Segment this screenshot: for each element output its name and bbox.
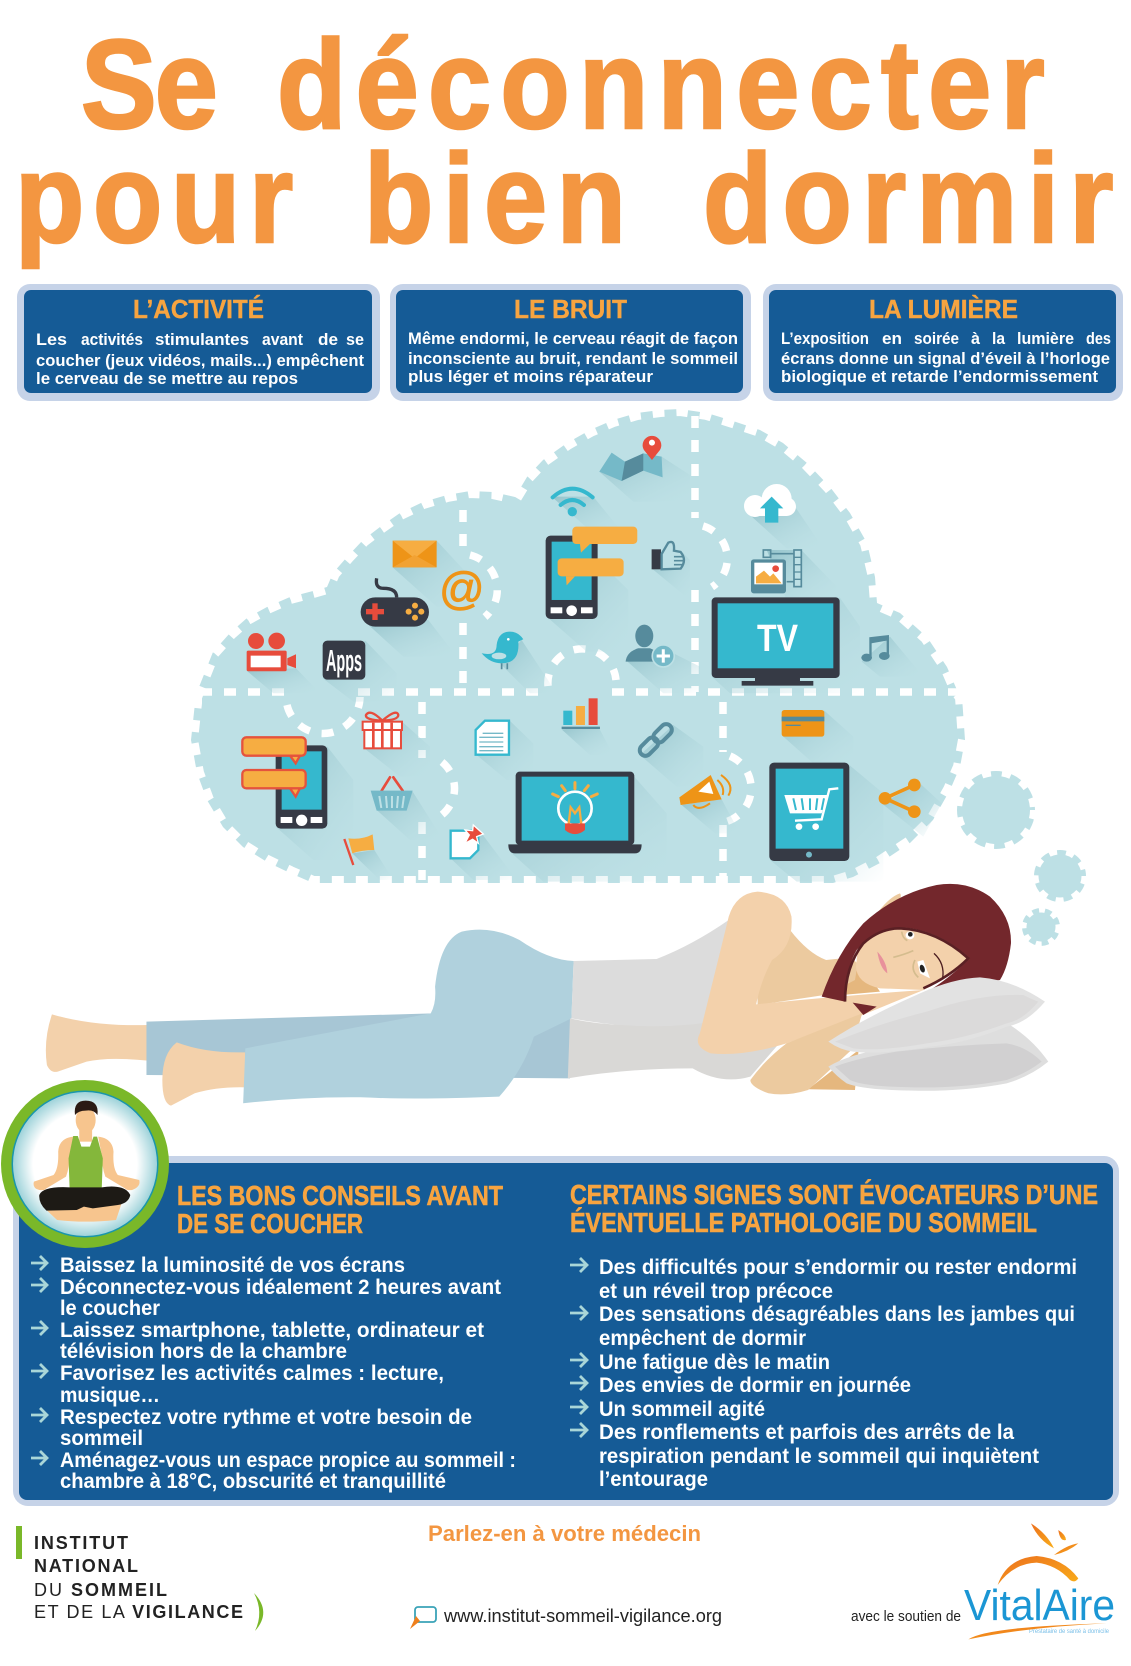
text: signs list: empêchent de dormir: [599, 1327, 806, 1350]
icon: television: TV: [757, 618, 799, 660]
text: advice list: Respectez votre rythme et votre besoin de: [60, 1406, 472, 1429]
text: la lumière: des: [1086, 329, 1111, 348]
text: l'activité: se: [346, 330, 364, 349]
cloud: [191, 409, 965, 883]
icon: television: [712, 597, 860, 693]
callout: talk to your doctor: Parlez-en à votre médecin: [428, 1521, 701, 1546]
website url: www.institut-sommeil-vigilance.org: [443, 1605, 722, 1626]
logo: vitalaire sponsor: VitalAire: [964, 1581, 1115, 1630]
icon: chain link: [637, 722, 703, 787]
panel: l'activité: [17, 284, 380, 401]
icon: speech bubble: [410, 1607, 436, 1629]
heading: signs: [570, 1179, 1098, 1238]
icon: shopping basket: [371, 777, 443, 840]
icon: document: [476, 720, 533, 780]
icon: gift: [363, 713, 430, 777]
logo: institut national du sommeil et de la vigilance: DU SOMMEIL: [34, 1580, 167, 1600]
panel: la lumière: [763, 284, 1123, 401]
text: advice list: Favorisez les activités calmes : lecture,: [60, 1362, 444, 1385]
logo: institut national du sommeil et de la vigilance: [16, 1526, 263, 1631]
text: signs list: Une fatigue dès le matin: [599, 1351, 830, 1374]
text: la lumière: à: [971, 329, 981, 348]
text: advice list: le coucher: [60, 1297, 160, 1320]
icon: tablet with cart: [769, 763, 883, 882]
icon: phone with red speech bubbles: [242, 737, 353, 860]
title: dormir: [703, 128, 1113, 269]
illustration: sleeping woman: [46, 884, 1048, 1106]
title: Se: [81, 14, 218, 155]
logo: vitalaire sponsor: [851, 1523, 1115, 1639]
text: advice list: musique…: [60, 1384, 160, 1407]
text: la lumière: soirée: [914, 329, 959, 348]
icon: bar chart: [562, 698, 613, 755]
icon: meditating figure badge: [1, 1080, 169, 1248]
text: signs list: Des envies de dormir en journée: [599, 1374, 911, 1397]
icon: share: [879, 779, 942, 837]
icon: map with pin: [599, 436, 690, 502]
title: bien: [364, 128, 626, 269]
icon: add user: [626, 625, 700, 693]
text: la lumière: la: [992, 329, 1005, 348]
heading: advice: DE SE COUCHER: [177, 1208, 363, 1239]
text: signs list: Des sensations désagréables dans les jambes qui: [599, 1303, 1075, 1326]
text: la lumière: en: [882, 329, 902, 348]
icon: pinned note: [451, 825, 517, 880]
title: pour: [15, 128, 293, 269]
text: le bruit: [408, 329, 738, 386]
text: l'activité: stimulantes: [155, 330, 249, 349]
title: déconnecter: [277, 14, 1045, 155]
icon: apps tile: [323, 641, 397, 702]
text: le bruit: inconsciente au bruit, rendant le sommeil: [408, 349, 738, 368]
text: signs list: [599, 1256, 1077, 1491]
text: advice list: télévision hors de la chambre: [60, 1340, 347, 1363]
text: advice list: Baissez la luminosité de vos écrans: [60, 1254, 405, 1277]
icon: credit card: [782, 710, 853, 763]
icon: bird: [482, 632, 557, 693]
text: la lumière: écrans donne un signal d’éveil à l’horloge: [781, 349, 1110, 368]
text: la lumière: L’exposition: [781, 329, 869, 348]
logo: vitalaire sponsor: Prestataire de santé à domicile: [1029, 1628, 1109, 1635]
icon: phone with speech bubbles: [546, 527, 637, 652]
icon: laptop with light bulb: [508, 772, 667, 882]
text: signs list: Des ronflements et parfois des arrêts de la: [599, 1421, 1014, 1444]
logo: vitalaire sponsor: avec le soutien de: [851, 1609, 961, 1625]
text: la lumière: lumière: [1017, 329, 1074, 348]
heading: la lumière: LA LUMIÈRE: [869, 294, 1018, 324]
icon: apps tile: Apps: [326, 643, 362, 678]
text: advice list: sommeil: [60, 1427, 143, 1450]
thought bubbles: [957, 771, 1086, 946]
logo: institut national du sommeil et de la vigilance: NATIONAL: [34, 1556, 138, 1576]
text: la lumière: biologique et retarde l’endormissement: [781, 367, 1098, 386]
heading: le bruit: LE BRUIT: [514, 294, 627, 324]
icon: megaphone: [679, 775, 740, 833]
text: l'activité: Les: [36, 330, 67, 349]
icon: cloud upload: [744, 484, 823, 548]
text: le bruit: plus léger et moins réparateur: [408, 367, 653, 386]
heading: signs: ÉVENTUELLE PATHOLOGIE DU SOMMEIL: [570, 1207, 1037, 1238]
icon: game controller: [361, 578, 457, 657]
text: l'activité: coucher (jeux vidéos, mails...) empêchent: [36, 351, 364, 370]
icon: music note: [861, 635, 923, 677]
text: advice list: [60, 1254, 516, 1493]
text: la lumière: [781, 329, 1111, 386]
text: l'activité: de: [318, 330, 338, 349]
icon: flag: [344, 834, 393, 880]
heading: advice: LES BONS CONSEILS AVANT: [177, 1180, 503, 1211]
text: l'activité: [36, 330, 364, 388]
panel: le bruit: [390, 284, 751, 401]
text: advice list: Laissez smartphone, tablette, ordinateur et: [60, 1319, 484, 1342]
heading: advice: [177, 1180, 503, 1239]
icon: envelope: [393, 541, 470, 607]
logo: institut national du sommeil et de la vigilance: INSTITUT: [34, 1533, 128, 1553]
arrows: advice list: [31, 1256, 47, 1465]
icon: wifi: [552, 489, 623, 533]
text: advice list: chambre à 18°C, obscurité et tranquillité: [60, 1470, 446, 1493]
text: l'activité: avant: [262, 330, 303, 349]
icon: image and film strip: [751, 550, 837, 600]
text: signs list: Des difficultés pour s’endormir ou rester endormi: [599, 1256, 1077, 1279]
title: [15, 14, 1113, 269]
text: l'activité: le cerveau de se mettre au repos: [36, 369, 298, 388]
text: signs list: l’entourage: [599, 1468, 708, 1491]
logo: institut national du sommeil et de la vigilance: ET DE LA VIGILANCE: [34, 1602, 243, 1622]
text: signs list: et un réveil trop précoce: [599, 1280, 833, 1303]
arrows: signs list: [570, 1258, 587, 1437]
text: signs list: respiration pendant le sommeil qui inquiètent: [599, 1445, 1039, 1468]
icon: at sign: @: [439, 563, 485, 614]
text: signs list: Un sommeil agité: [599, 1398, 765, 1421]
text: advice list: Déconnectez-vous idéalement 2 heures avant: [60, 1276, 501, 1299]
panel: advice and signs: [13, 1156, 1119, 1506]
text: le bruit: Même endormi, le cerveau réagit de façon: [408, 329, 738, 348]
text: l'activité: activités: [81, 330, 143, 349]
icon: video camera: [247, 633, 320, 693]
heading: l'activité: L’ACTIVITÉ: [133, 294, 264, 324]
icon: thumbs up: [652, 542, 690, 600]
text: advice list: Aménagez-vous un espace propice au sommeil :: [60, 1449, 516, 1472]
